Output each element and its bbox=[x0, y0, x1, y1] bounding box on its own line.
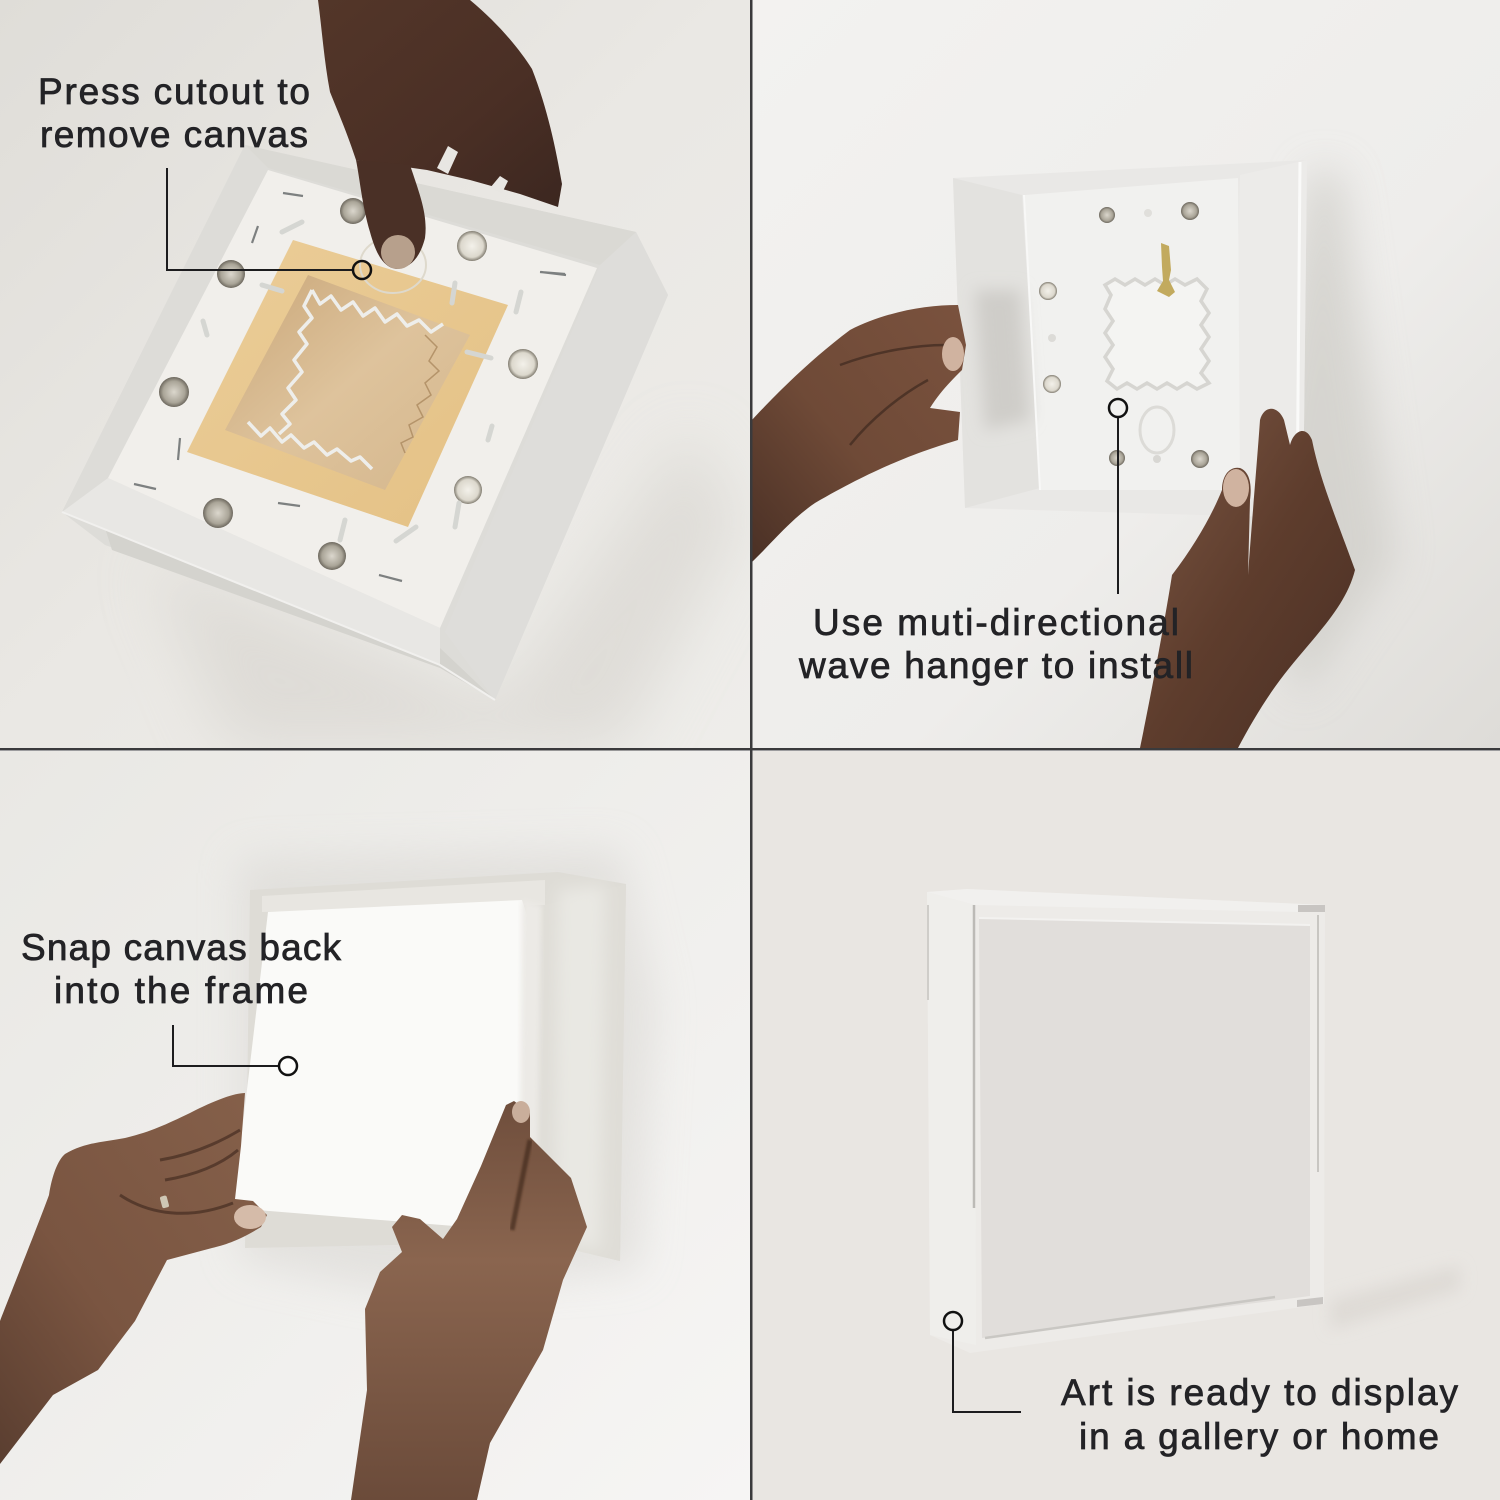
callout: hanger bbox=[1109, 399, 1127, 594]
canvas back bbox=[108, 170, 597, 628]
panel: wave hanger install bbox=[752, 0, 1500, 748]
frame shadow bbox=[150, 430, 740, 748]
left hand folds bbox=[120, 1130, 240, 1213]
cutout opening bbox=[225, 275, 470, 490]
clear pins bbox=[203, 222, 521, 541]
finger gap shading bbox=[512, 1140, 530, 1230]
left thumbnail bbox=[942, 337, 964, 371]
canvas bottom shadow bbox=[985, 1297, 1275, 1338]
acrylic frame back bbox=[953, 160, 1307, 518]
left thumbnail bbox=[234, 1205, 266, 1229]
panel: ready to display bbox=[752, 751, 1500, 1500]
oval cutout bbox=[1140, 407, 1174, 453]
label: press cutout bbox=[38, 71, 310, 155]
acrylic frame bbox=[62, 145, 668, 700]
magnets bbox=[1039, 202, 1209, 468]
brass hook bbox=[1157, 243, 1175, 297]
callout: snap bbox=[173, 1025, 297, 1075]
label: hanger bbox=[798, 602, 1193, 686]
panel: snap canvas back bbox=[0, 751, 750, 1500]
acrylic frame bbox=[245, 872, 626, 1261]
frame shadow bbox=[1250, 170, 1395, 700]
label: snap: into the frame bbox=[54, 970, 308, 1011]
label: hanger: wave hanger to install bbox=[798, 645, 1193, 686]
callout: display bbox=[944, 1312, 1021, 1412]
logo ring bbox=[360, 237, 426, 293]
wave cutout bbox=[1105, 279, 1209, 389]
frame shadow bbox=[1330, 1265, 1460, 1330]
label: snap: Snap canvas back bbox=[21, 927, 342, 968]
gaps between fingers bbox=[437, 146, 508, 193]
wedding ring bbox=[160, 1195, 169, 1209]
label: display: Art is ready to display bbox=[1061, 1372, 1458, 1413]
white canvas bbox=[233, 900, 532, 1232]
acrylic frame bbox=[927, 889, 1325, 1353]
label: display: in a gallery or home bbox=[1079, 1416, 1439, 1457]
right thumbnail bbox=[1223, 469, 1249, 507]
hand reaching down bbox=[318, 0, 562, 207]
canvas front bbox=[979, 918, 1310, 1338]
frame shadow bbox=[240, 850, 655, 1290]
wooden stretcher bbox=[187, 240, 508, 527]
label: press cutout: remove canvas bbox=[40, 114, 308, 155]
canvas side shading bbox=[520, 900, 542, 1150]
staples bbox=[134, 193, 566, 581]
thumbnail bbox=[381, 235, 415, 269]
wave cutout bbox=[248, 290, 443, 469]
magnets bbox=[159, 198, 538, 570]
right hand bbox=[351, 1101, 587, 1500]
frame corner clips bbox=[1297, 905, 1325, 1307]
left hand bbox=[752, 305, 966, 562]
left hand bbox=[0, 1093, 267, 1464]
right hand bbox=[1140, 409, 1355, 748]
label: hanger: Use muti-directional bbox=[813, 602, 1179, 643]
left hand creases bbox=[840, 345, 945, 445]
clear edge highlights bbox=[928, 905, 1318, 1208]
canvas top highlight bbox=[979, 918, 1310, 925]
faint right wave bbox=[401, 335, 439, 453]
label: press cutout: Press cutout to bbox=[38, 71, 310, 112]
label: display bbox=[1061, 1372, 1458, 1457]
thumb bbox=[356, 160, 426, 269]
callout: press cutout bbox=[167, 168, 371, 279]
panel: press cutout to remove canvas bbox=[0, 0, 750, 748]
right fingernail bbox=[512, 1101, 530, 1123]
label: snap bbox=[21, 927, 342, 1011]
